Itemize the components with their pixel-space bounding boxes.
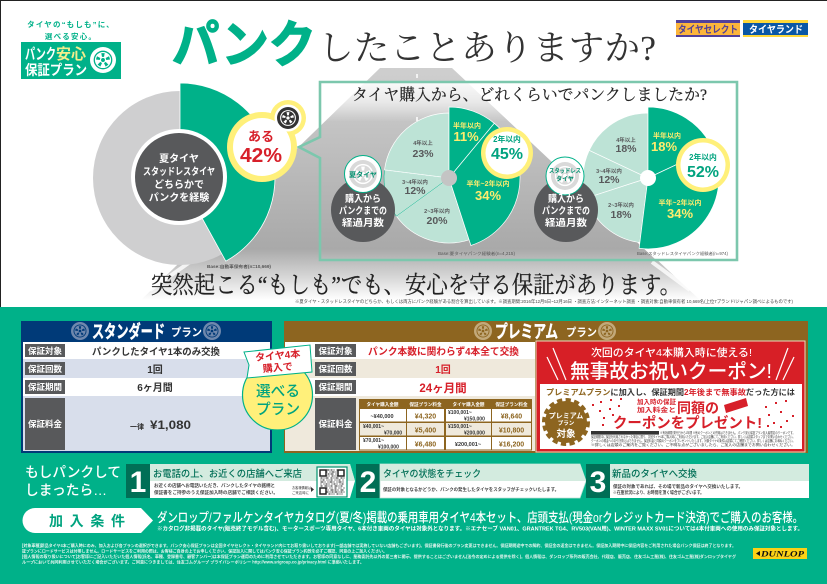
plan header: プレミアム bbox=[495, 322, 558, 342]
row labels: 保証料金 bbox=[28, 419, 62, 429]
pie chart: summer tires: 半年~2年以内 bbox=[467, 179, 509, 188]
logo: plan brand: パンク bbox=[25, 46, 56, 63]
row values bbox=[368, 345, 519, 395]
shop logos: タイヤセレクト bbox=[678, 24, 738, 36]
step 2: 2 bbox=[360, 466, 376, 499]
row values: 6ヶ月間 bbox=[137, 382, 173, 394]
row values: パンクしたタイヤ1本のみ交換 bbox=[92, 346, 220, 358]
fee table: ¥16,200 bbox=[499, 442, 524, 448]
plan header: スタンダード bbox=[92, 321, 165, 342]
panel: months until puncture bbox=[299, 82, 737, 260]
pie chart: studless tires: 18% bbox=[651, 139, 677, 154]
logo: plan brand bbox=[21, 19, 121, 79]
badge: studless tire months: 購入から bbox=[548, 193, 584, 205]
fee table: ¥150,000 bbox=[464, 416, 485, 422]
pie chart: studless tires: 2~3年以内 bbox=[608, 201, 634, 209]
badge: choose plan: タイヤ4本 bbox=[255, 347, 301, 364]
badge: summer tire months: 購入から bbox=[345, 193, 381, 205]
badge: premium only: プラン bbox=[558, 420, 575, 427]
panel heading: タイヤ購入から、どれくらいでパンクしましたか? bbox=[352, 86, 707, 104]
callout: studless 52% bbox=[676, 138, 730, 192]
step 1: お近くの店舗へお電話いただき、パンクしたタイヤの銘柄と bbox=[154, 482, 275, 489]
coupon lead text: プレミアムプランに加入し、保証期間2年後まで無事故だった方には bbox=[546, 387, 795, 397]
pie chart: studless tires: 4年以上 bbox=[616, 136, 636, 144]
coupon offer: 同額の bbox=[677, 400, 719, 416]
panel: coupon: 次回のタイヤ4本購入時に使える! bbox=[591, 346, 752, 359]
survey note: ※夏タイヤ・スタッドレスタイヤのどちらか、もしくは両方にパンク経験がある割合を算出しています。※調査期間:2016年12月5日~12月16日 ・調査方法:インターネット調査 ・調査対象:自動車保有者 10,669名(上位7ブランド/ジャパン調べによるものです) bbox=[295, 298, 794, 305]
plan header: プラン bbox=[171, 326, 202, 339]
row labels: 保証対象 bbox=[318, 346, 353, 356]
callout: studless 52%: 2年以内 bbox=[689, 152, 717, 162]
eligibility label bbox=[22, 508, 153, 533]
panel: coupon bbox=[536, 341, 805, 452]
callout: yes 42%: ある bbox=[248, 129, 274, 144]
logo: Dunlop bbox=[753, 548, 807, 559]
badge: studless tire months: スタッドレス bbox=[549, 167, 581, 175]
row labels bbox=[25, 344, 65, 450]
fee table: ¥5,400 bbox=[415, 428, 436, 434]
row values: 24ヶ月間 bbox=[419, 382, 467, 395]
pie chart: studless tires: 12% bbox=[598, 174, 620, 186]
subheading: 突然起こる“もしも”でも、安心を守る保証があります。 bbox=[151, 272, 681, 299]
badge: choose plan bbox=[242, 345, 312, 430]
pie chart: summer tires bbox=[384, 107, 520, 245]
callout: studless 52%: 52% bbox=[687, 164, 719, 181]
eligibility text bbox=[157, 510, 803, 532]
pie chart: summer tires: 2~3年以内 bbox=[424, 207, 450, 215]
pie chart: studless tires: 半年以内 bbox=[653, 131, 681, 140]
fee table: ¥100,001~ bbox=[448, 410, 472, 416]
step 3: 新品のタイヤへ交換 bbox=[612, 468, 697, 480]
step 3: 3 bbox=[590, 466, 606, 499]
callout: yes 42% bbox=[227, 100, 306, 182]
callout: yes 42%: 42% bbox=[240, 145, 282, 167]
fee table: ¥10,800 bbox=[499, 428, 524, 434]
pie chart: studless tires: 18% bbox=[610, 209, 632, 221]
legal fine print bbox=[22, 542, 737, 566]
fee table: ~¥40,000 bbox=[370, 414, 394, 420]
row values: ¥1,080 bbox=[150, 418, 191, 432]
badge: studless tire months bbox=[534, 157, 598, 242]
panel: premium plan bbox=[284, 321, 808, 453]
row values: 一律 bbox=[130, 422, 144, 431]
badge: premium only bbox=[545, 401, 587, 443]
fee table: ¥6,480 bbox=[415, 442, 436, 448]
row labels bbox=[315, 344, 356, 450]
fee table: 保証プラン料金 bbox=[409, 401, 442, 408]
fee table: ¥200,000 bbox=[464, 430, 485, 436]
heading: if you get a puncture: しまったら… bbox=[25, 482, 107, 498]
pie chart: summer tires: 3~4年以内 bbox=[402, 178, 428, 186]
pie chart: studless tires: 34% bbox=[667, 206, 693, 221]
pie chart: studless tires: 18% bbox=[615, 143, 637, 155]
fee table: タイヤ購入金額 bbox=[366, 401, 399, 408]
row values: 1回 bbox=[147, 364, 163, 376]
badge: studless tire months: 経過月数 bbox=[545, 217, 588, 229]
step 1: ご来店時に bbox=[292, 490, 309, 495]
fee table: タイヤ購入金額 bbox=[452, 401, 485, 408]
icon: QR code bbox=[317, 467, 347, 497]
pie chart: summer tires: 20% bbox=[426, 215, 448, 227]
panel: coupon: 無事故お祝いクーポン! bbox=[570, 360, 772, 383]
fee table: ¥150,001~ bbox=[448, 424, 472, 430]
callout: summer 45%: 45% bbox=[491, 146, 523, 163]
eligibility text: ※カタログ非掲載のタイヤ(販売終了モデル含む)、モータースポーツ専用タイヤ、6本付き車両のタイヤは対象外となります。※エナセーブ VAN01、GRANTREK TG4、RV503(VAN用)、WINTER MAXX SV01については4本付車両への使用のみ保証対象とします。 bbox=[157, 524, 803, 532]
coupon fine print: ※詳しくは店頭のご案内をご覧ください。ご不明な点がございましたら、ご加入の店舗までお問い合わせください。 bbox=[591, 442, 795, 447]
fee table: ¥4,320 bbox=[415, 414, 436, 420]
logo: plan brand: 保証プラン bbox=[25, 62, 87, 78]
fee table: ¥100,000 bbox=[378, 444, 399, 450]
legal fine print: ループにおいて共同利用させていただく場合がございます。ご同意につきましては、住友ゴムグループ プライバシーポリシー http://www.srigroup.co.jp/privacy.html に準拠いたします。 bbox=[22, 558, 364, 566]
coupon fine print bbox=[591, 430, 795, 447]
step 1: お客様情報は bbox=[292, 485, 311, 490]
step 1: 1 bbox=[130, 466, 146, 499]
logo: plan brand: 安心 bbox=[56, 45, 86, 63]
step 3: 保証の対象であれば、その場で新品のタイヤへ交換いたします。 bbox=[613, 483, 743, 490]
step 1: お電話の上、お近くの店舗へご来店 bbox=[153, 468, 302, 480]
coupon offer: 加入料金と bbox=[637, 405, 676, 414]
pie chart: summer tires: 34% bbox=[475, 188, 501, 203]
panel: months until puncture: Base:スタッドレスタイヤパンク経験者(n=974) bbox=[637, 250, 729, 257]
coupon offer bbox=[592, 397, 794, 432]
row labels: 保証料金 bbox=[318, 419, 353, 429]
donut chart: puncture experience 42%: どちらかで bbox=[154, 178, 204, 191]
plan header bbox=[71, 321, 221, 342]
green background band bbox=[0, 307, 827, 584]
heading: if you get a puncture bbox=[25, 464, 121, 498]
row labels: 保証期間 bbox=[318, 382, 353, 392]
donut chart: puncture experience 42%: Base:自動車保有者(n=10,669) bbox=[207, 263, 272, 270]
badge: choose plan: 購入で bbox=[262, 360, 293, 375]
eligibility label: 加入条件 bbox=[49, 513, 125, 529]
title: パンク bbox=[172, 17, 316, 73]
shop logos: タイヤランド bbox=[749, 24, 803, 36]
pie chart: summer tires: 23% bbox=[412, 148, 434, 160]
row labels: 保証回数 bbox=[318, 364, 353, 374]
pie chart: summer tires: 12% bbox=[404, 185, 426, 197]
row values: 1回 bbox=[435, 364, 451, 376]
badge: premium only: プレミアム bbox=[549, 412, 583, 420]
pie chart: studless tires: 3~4年以内 bbox=[596, 167, 622, 175]
fee table: ¥200,001~ bbox=[455, 442, 481, 448]
donut chart: puncture experience 42% bbox=[93, 83, 275, 270]
step 1: 保証書をご持参のうえ保証加入時の店舗でご相談ください。 bbox=[154, 489, 278, 496]
pie chart: studless tires: 半年~2年以内 bbox=[659, 198, 701, 207]
pie chart: summer tires: 4年以上 bbox=[413, 139, 433, 147]
coupon offer: 加入時の保証 bbox=[637, 397, 677, 406]
panel: months until puncture: Base:夏タイヤパンク経験者(n=4,215) bbox=[438, 250, 516, 257]
row values bbox=[92, 346, 220, 432]
coupon offer: クーポンをプレゼント! bbox=[613, 414, 762, 432]
badge: summer tire months: 経過月数 bbox=[342, 217, 385, 229]
pie chart: summer tires: 11% bbox=[453, 129, 479, 144]
fee table: ¥40,001~ bbox=[363, 424, 384, 430]
legal fine print: [個人情報の取り扱いについて]お客様にご記入いただいた個人情報(氏名、車種、登録番号、顧客ナンバー)は本保証プラン運用のために利用させていただきます。お客様の同意なしに、業務委託先以外の第三者に開示、提供することはございません(法令の定めによる提供を除く)。個人情報は、ダンロップ系列の販売会社、代理店、販売店、住友ゴム工業(株)、住友ゴム工業(株)ダンロップタイヤグ bbox=[22, 553, 737, 560]
badge: choose plan: プラン bbox=[256, 401, 300, 418]
badge: summer tire months: 夏タイヤ bbox=[349, 170, 377, 179]
pie chart: summer tires: 半年以内 bbox=[453, 121, 481, 130]
badge: studless tire months: パンクまでの bbox=[542, 206, 590, 217]
logo: plan brand: 選べる安心。 bbox=[45, 31, 97, 41]
fee table: 保証プラン料金 bbox=[495, 401, 528, 408]
logo: Dunlop: DUNLOP bbox=[760, 550, 804, 558]
callout: summer 45% bbox=[481, 127, 533, 179]
shop logos bbox=[676, 20, 808, 37]
panel: standard plan bbox=[21, 321, 272, 453]
fee table: ¥8,640 bbox=[501, 414, 522, 420]
row labels: 保証回数 bbox=[28, 364, 62, 374]
road background bbox=[141, 68, 700, 300]
fee table bbox=[359, 399, 532, 450]
step 3: ※在庫状況により、お時間を頂く場合がございます。 bbox=[613, 489, 704, 496]
legal fine print: [対象車種]新品タイヤ4本ご購入時にのみ、加入および各プランの選択ができます。パンク安心保証プランは全国タイヤセレクト・タイヤランド内にてお取り扱いしております(一部店舗では実施していない店舗もございます)。保証書発行後のプラン変更はできません。保証期間途中での解約、保証金の返金はできません。保証加入期間中に保証内容をご利用された場合パンク保証は終了となります。 bbox=[22, 542, 736, 549]
title bbox=[172, 17, 656, 73]
step 2: 保証の対象となるかどうか、パンクの発生したタイヤをスタッフがチェックいたします。 bbox=[383, 486, 559, 493]
badge: premium only: 対象 bbox=[556, 428, 576, 440]
donut chart: puncture experience 42%: スタッドレスタイヤ bbox=[143, 166, 215, 178]
plan header bbox=[474, 322, 616, 342]
callout: summer 45%: 2年以内 bbox=[493, 134, 521, 144]
badge: summer tire months bbox=[331, 156, 395, 242]
step 1 bbox=[126, 464, 355, 499]
step 3 bbox=[586, 464, 809, 499]
donut chart: puncture experience 42%: 夏タイヤ bbox=[159, 153, 199, 165]
donut chart: puncture experience 42%: パンクを経験 bbox=[149, 191, 209, 204]
logo: plan brand: タイヤの“もしも”に、 bbox=[27, 19, 115, 29]
row values: パンク本数に関わらず4本全て交換 bbox=[368, 345, 519, 358]
badge: summer tire months: パンクまでの bbox=[339, 206, 387, 217]
legal fine print: 証プランにロードサービスは付帯しません。ロードサービスをご利用の際は、お客様ご自身の上でお申しください。保証加入に関してはパンク安心保証プラン約款を必ずご確認、同意の上ご加入ください。 bbox=[22, 548, 387, 554]
row labels: 保証期間 bbox=[28, 382, 62, 392]
badge: choose plan: 選べる bbox=[256, 383, 300, 400]
plan header: プラン bbox=[566, 326, 597, 339]
row labels: 保証対象 bbox=[28, 346, 62, 356]
pie chart: studless tires bbox=[583, 107, 719, 249]
title: したことありますか? bbox=[318, 29, 656, 68]
badge: studless tire months: タイヤ bbox=[556, 175, 574, 183]
step 2: タイヤの状態をチェック bbox=[383, 468, 481, 480]
fee table: ¥70,001~ bbox=[363, 438, 384, 444]
fee table: ¥70,000 bbox=[384, 430, 402, 436]
heading: if you get a puncture: もしパンクして bbox=[25, 464, 121, 480]
step 2 bbox=[356, 464, 586, 499]
